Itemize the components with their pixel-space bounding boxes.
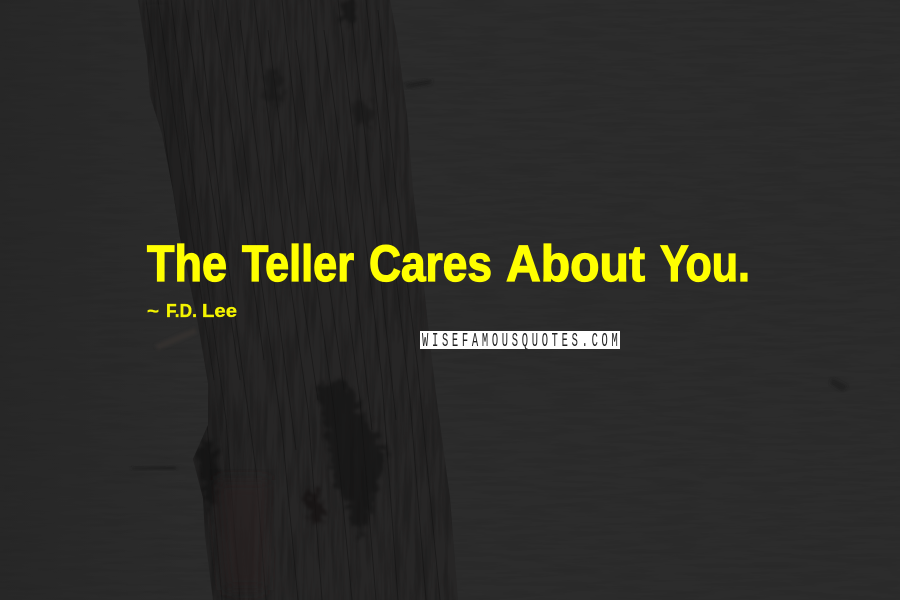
quote text: You. <box>660 235 750 292</box>
quote poster <box>132 0 845 600</box>
quote text: Teller <box>242 235 354 292</box>
author attribution: F.D. <box>166 301 197 321</box>
quote text: About <box>506 235 645 292</box>
quote text <box>147 235 750 292</box>
author attribution: Lee <box>202 301 237 321</box>
author attribution: ~ <box>147 301 159 321</box>
author attribution <box>147 301 237 321</box>
quote text: The <box>147 235 227 292</box>
watermark: wisefamousquotes.com: WISEFAMOUSQUOTES.COM <box>422 330 618 352</box>
quote text: Cares <box>369 235 492 292</box>
tree trunk <box>130 0 470 600</box>
